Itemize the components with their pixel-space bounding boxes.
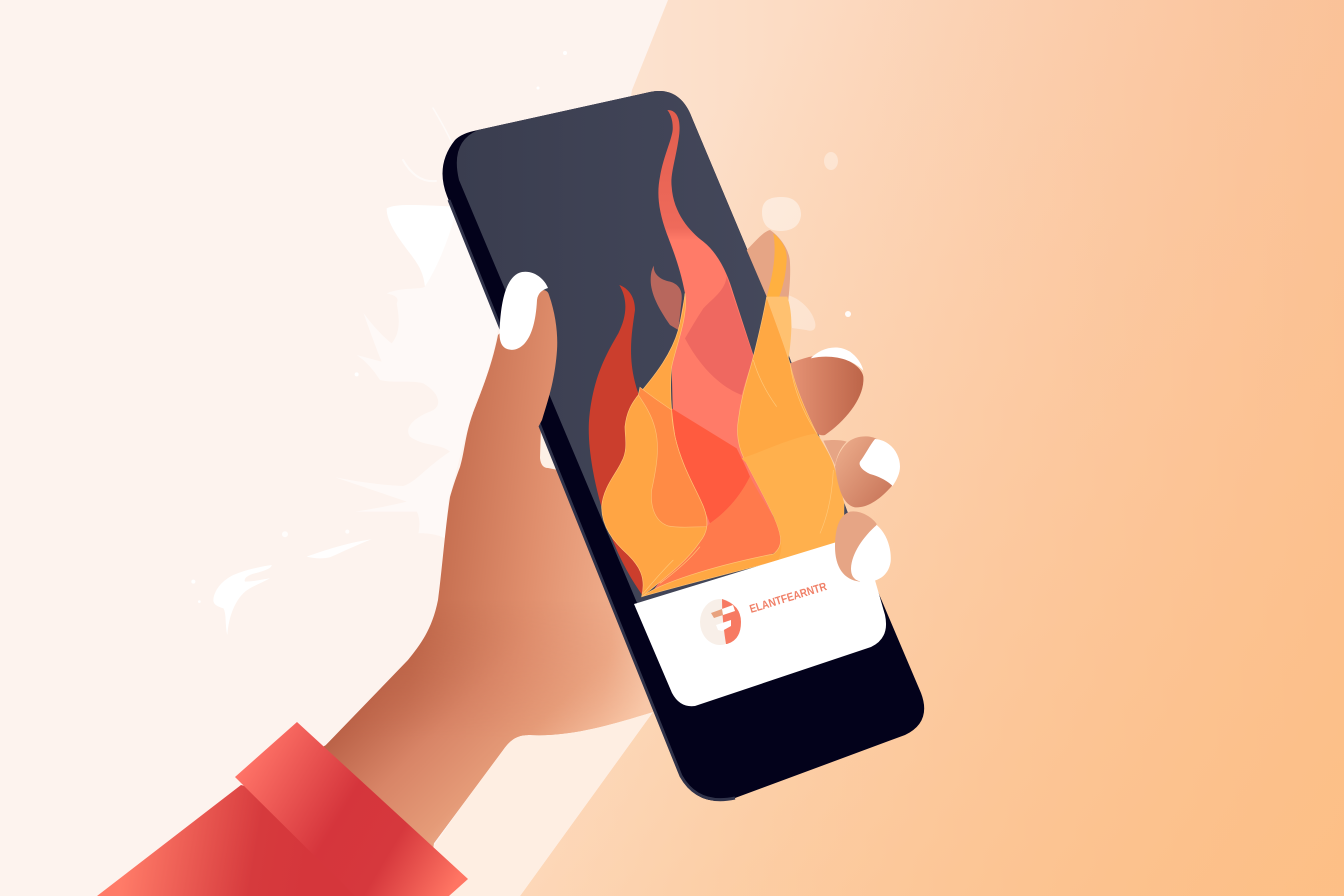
hand: palm and wrist bbox=[324, 373, 653, 848]
splash: white paint marks left of the phone bbox=[191, 205, 498, 635]
flame: bright red core bbox=[672, 408, 750, 523]
flame: right orange tongue bbox=[642, 297, 844, 597]
flame: inner highlight lines bbox=[643, 360, 833, 593]
sleeve bbox=[97, 785, 375, 896]
card: brand name: ELANTFEARNTR bbox=[748, 581, 829, 616]
background: pale wedge under palm bbox=[400, 712, 653, 896]
finger: middle finger bbox=[783, 347, 863, 435]
background: cream left panel bbox=[0, 0, 668, 896]
finger: little finger bbox=[835, 511, 891, 582]
flame bbox=[589, 110, 863, 597]
finger: back index finger bbox=[747, 230, 790, 300]
flame: lower orange bbox=[657, 477, 782, 587]
splash: bubbles right of the phone bbox=[762, 152, 851, 331]
splash: wisps and sparks above the phone bbox=[403, 51, 567, 181]
background: peach right side bbox=[480, 0, 1344, 896]
flame: translucent upper tongue bbox=[767, 297, 791, 360]
thumb: nail bbox=[500, 272, 548, 350]
card: round logo bbox=[700, 599, 741, 645]
detail: pale sliver beside the phone edge bbox=[540, 425, 558, 470]
card: white notification bbox=[634, 535, 886, 706]
thumb bbox=[473, 272, 557, 480]
flame: darker coral patch bbox=[685, 277, 753, 395]
phone: body bbox=[442, 91, 924, 801]
flame: back red tongue bbox=[589, 285, 643, 597]
flame: inner orange shade bbox=[638, 387, 707, 527]
flame: finger-tip tongue bbox=[767, 233, 787, 299]
phone: screen bbox=[457, 91, 860, 610]
flame: left orange tongue bbox=[602, 293, 707, 597]
flame: dim tongue bbox=[651, 266, 682, 330]
flame: tall coral tongue bbox=[653, 110, 780, 590]
flame: right tongue lower tone bbox=[742, 433, 844, 561]
nail: ring finger bbox=[860, 439, 900, 486]
sleeve: cuff bbox=[235, 722, 468, 896]
finger: ring finger bbox=[823, 436, 900, 507]
